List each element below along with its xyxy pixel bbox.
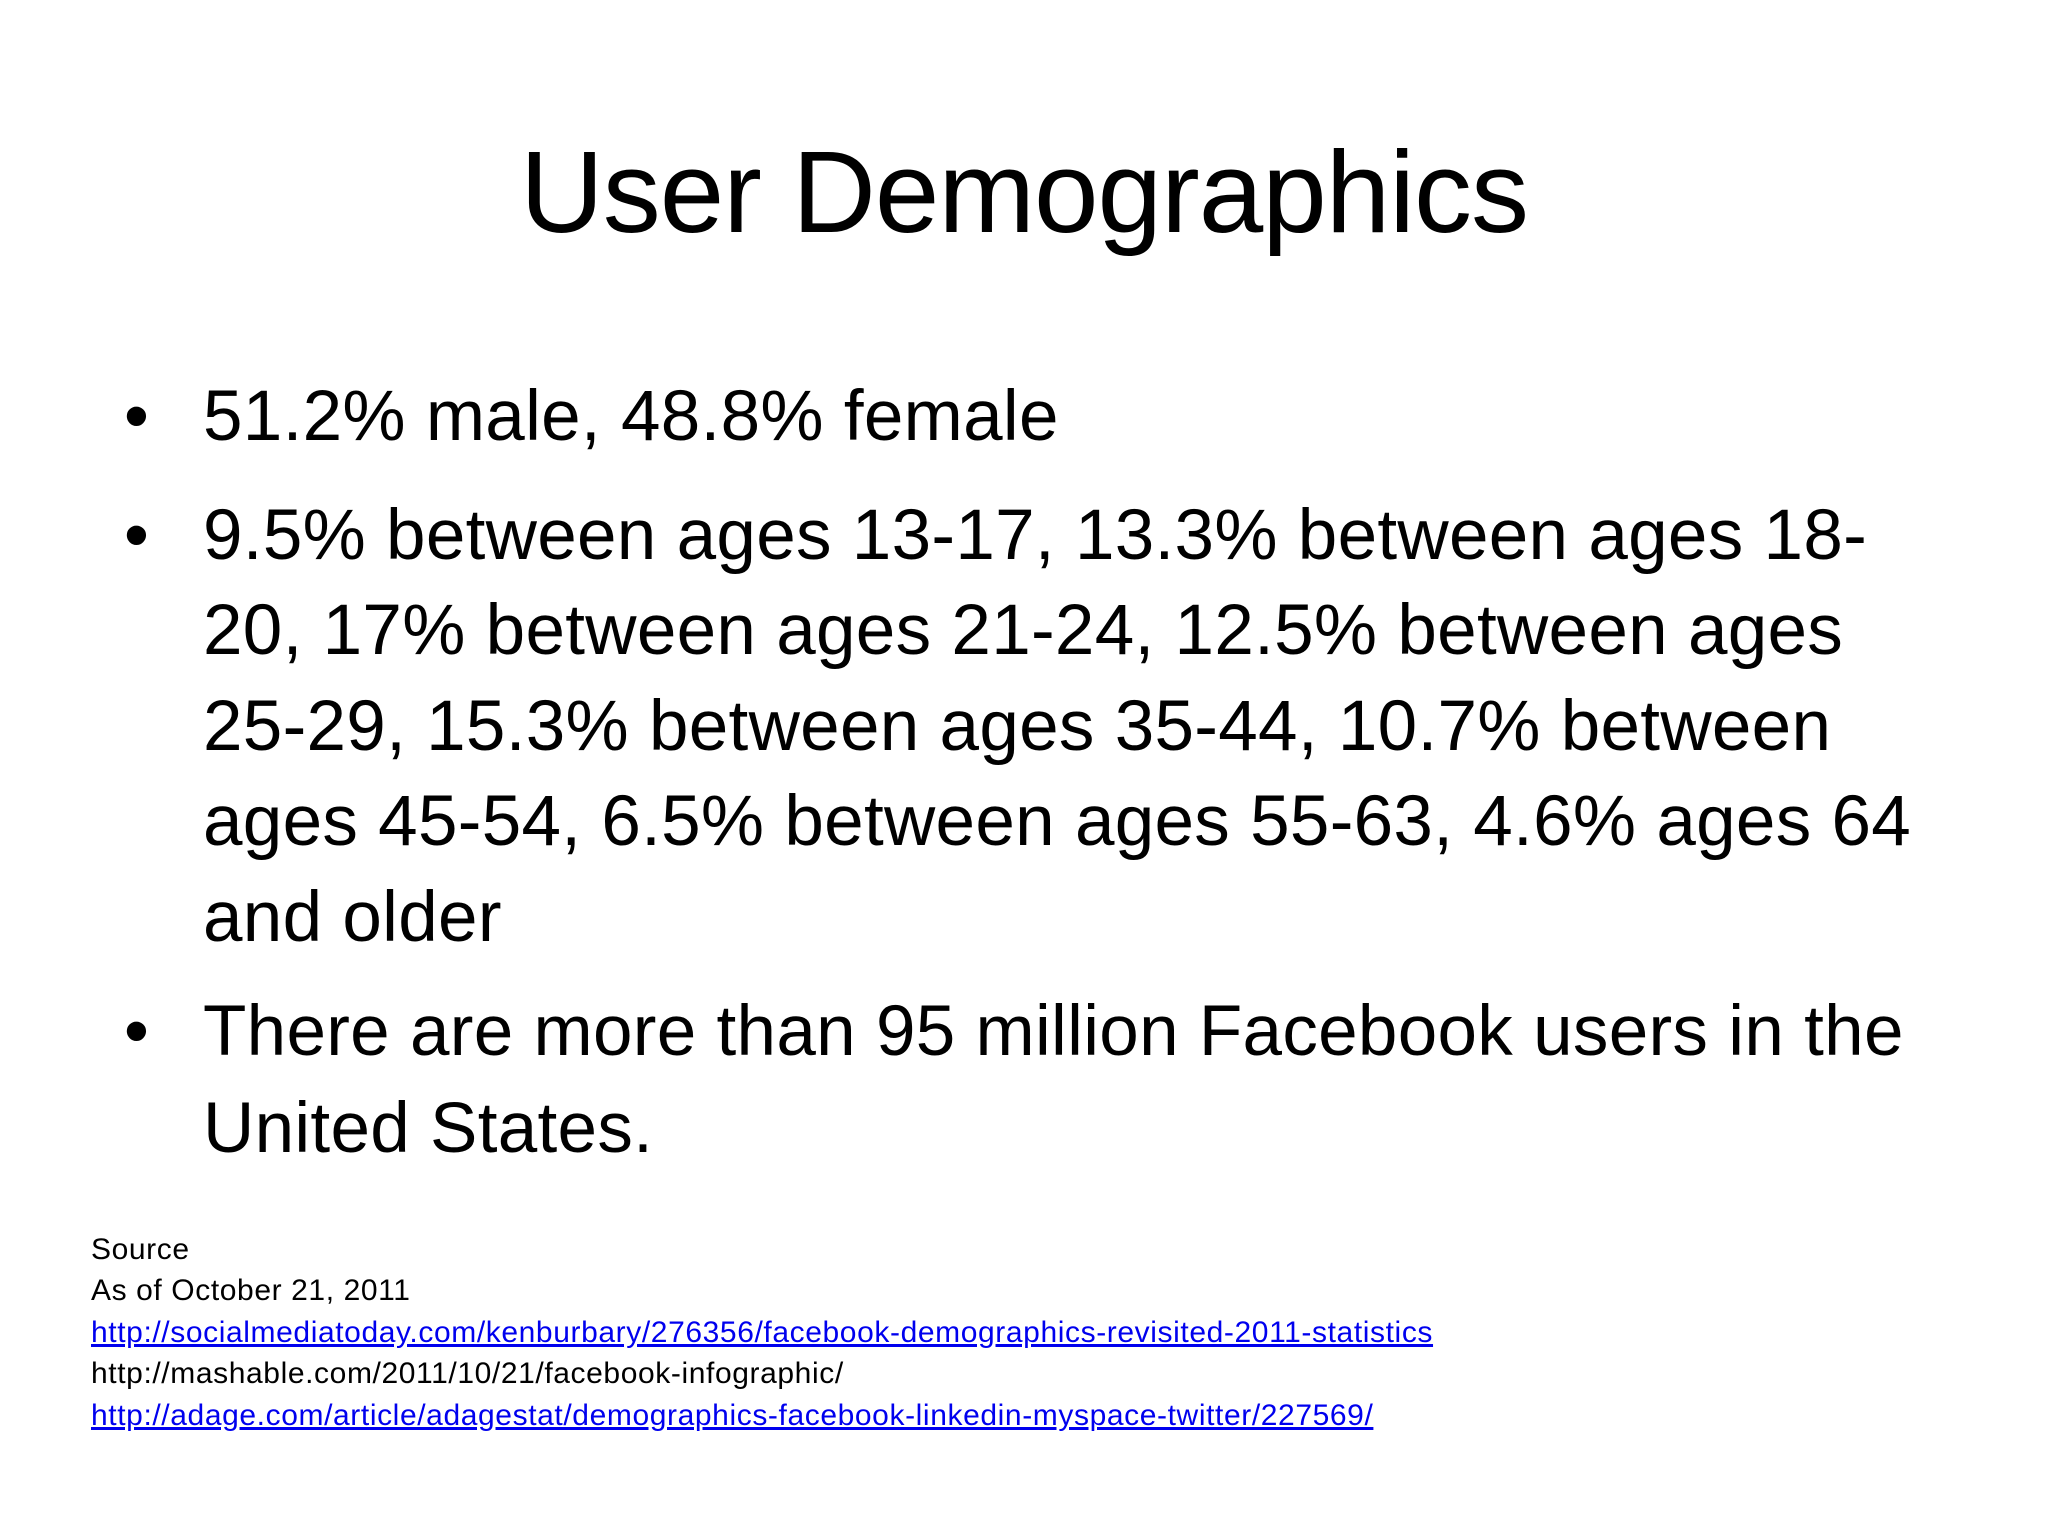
bullet 3: There are more than 95 million Facebook users in the (203, 992, 1904, 1071)
source notes: As of October 21, 2011 (91, 1274, 410, 1307)
bullet 1: • (124, 377, 149, 456)
bullet 2 (124, 496, 1911, 957)
source notes: http://adage.com/article/adagestat/demographics-facebook-linkedin-myspace-twitter/227569/ (91, 1399, 1373, 1432)
bullet 2: • (124, 496, 149, 575)
bullet 3 (124, 992, 1904, 1168)
title: User Demographics (520, 127, 1528, 257)
bullet 2: ages 45-54, 6.5% between ages 55-63, 4.6% ages 64 (203, 782, 1911, 861)
source notes: http://socialmediatoday.com/kenburbary/276356/facebook-demographics-revisited-2011-statistics (91, 1316, 1433, 1349)
source notes (91, 1233, 1434, 1432)
bullet 2: and older (203, 878, 502, 957)
source notes: Source (91, 1233, 190, 1266)
bullet 1: 51.2% male, 48.8% female (203, 377, 1059, 456)
bullet 2: 25-29, 15.3% between ages 35-44, 10.7% between (203, 687, 1831, 766)
bullet 3: United States. (203, 1089, 653, 1168)
bullet 2: 9.5% between ages 13-17, 13.3% between ages 18- (203, 496, 1867, 575)
bullet 2: 20, 17% between ages 21-24, 12.5% between ages (203, 591, 1843, 670)
source notes: http://mashable.com/2011/10/21/facebook-infographic/ (91, 1357, 844, 1390)
bullet 3: • (124, 992, 149, 1071)
bullet list (124, 377, 1911, 1168)
